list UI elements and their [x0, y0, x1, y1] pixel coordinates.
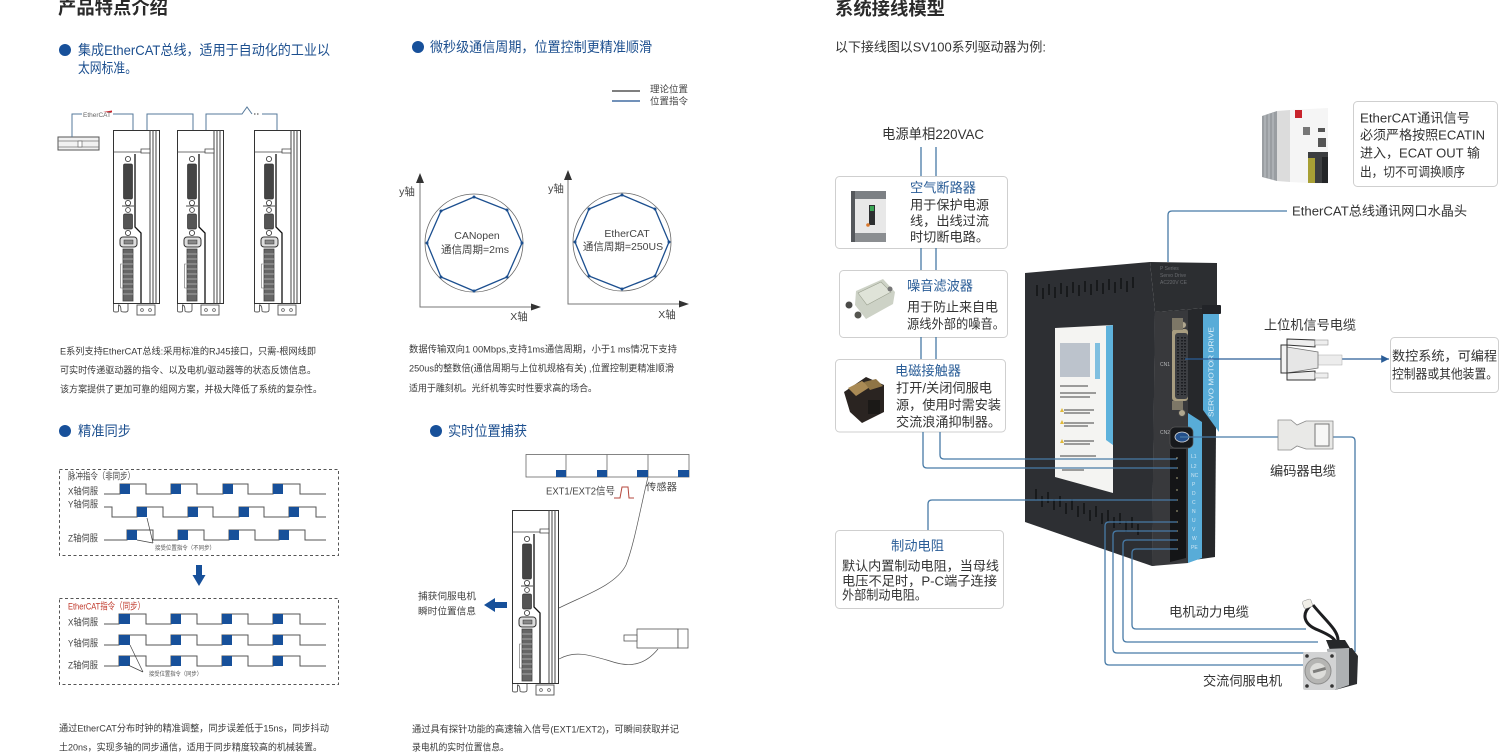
illustration: servo drive: P Series — [1160, 266, 1179, 272]
illustration: servo drive: CN2 — [1160, 430, 1170, 436]
text: wiring intro: 以下接线图以SV100系列驱动器为例: — [835, 38, 1046, 54]
chart: EtherCAT trajectory — [548, 170, 689, 321]
terminal labels: PE — [1191, 545, 1198, 551]
chart: EtherCAT command, synchronized: Z轴伺服 — [68, 660, 98, 672]
chart: pulse command, not synchronized: 脉冲指令（非同步） — [68, 470, 135, 482]
legend — [612, 84, 688, 108]
callout: EtherCAT signal note: 进入，ECAT OUT 输 — [1360, 146, 1480, 160]
heading: EtherCAT bus: 集成EtherCAT总线，适用于自动化的工业以 — [78, 42, 330, 58]
callout: CNC / PLC: 数控系统，可编程 — [1392, 348, 1497, 364]
icon: breaker — [851, 191, 886, 242]
wiring: motor power cable — [1105, 522, 1318, 665]
arrow: down — [192, 565, 206, 586]
illustration: servo drive: AC220V CE — [1160, 280, 1188, 286]
CN1 connector — [1172, 318, 1188, 416]
chart: EtherCAT command, synchronized: 接受位置指令（同步） — [149, 670, 202, 678]
CN2 connector — [1170, 427, 1193, 448]
text: communication cycle description — [409, 344, 677, 394]
text: communication cycle description: 数据传输双向1 00Mbps,支持1ms通信周期，小于1 ms情况下支持 — [409, 344, 677, 356]
text: capture description: 通过具有探针功能的高速输入信号(EXT1/EXT2)，可瞬间获取并记 — [412, 724, 679, 736]
wiring: controller signal cable — [1185, 358, 1389, 360]
diagram: position capture: EXT1/EXT2信号 — [546, 486, 615, 498]
text: communication cycle description: 适用于雕刻机。光纤机等实时性要求高的场合。 — [409, 382, 597, 394]
diagram: EtherCAT daisy chain of drives: EtherCAT — [83, 113, 111, 119]
terminal labels: NC — [1191, 473, 1199, 479]
chart: CANopen trajectory: CANopen — [454, 230, 500, 242]
text: capture description — [412, 724, 679, 753]
power terminal — [1170, 449, 1186, 562]
heading: EtherCAT bus — [59, 42, 330, 76]
diagram: position capture: 瞬时位置信息 — [418, 604, 476, 618]
heading: microsecond cycle: 微秒级通信周期，位置控制更精准顺滑 — [430, 39, 652, 55]
chart: EtherCAT trajectory: X轴 — [658, 308, 676, 321]
terminal labels: L1 — [1191, 454, 1197, 460]
panel: air circuit breaker: 线，出线过流 — [910, 214, 989, 228]
terminal labels: D — [1192, 491, 1196, 497]
chart: pulse command, not synchronized: 接受位置指令（不同步） — [155, 544, 215, 552]
text: EtherCAT bus description — [60, 346, 322, 396]
chart: EtherCAT command, synchronized: Y轴伺服 — [68, 638, 98, 650]
wiring: power lines to terminals — [921, 147, 1177, 530]
chart: EtherCAT trajectory: EtherCAT — [604, 228, 650, 240]
panel: magnetic contactor: 交流浪涌抑制器。 — [896, 414, 1001, 430]
panel: air circuit breaker: 时切断电路。 — [910, 230, 989, 244]
illustration: servo drive: CN1 — [1160, 362, 1170, 368]
icon: signal cable connector — [1281, 339, 1342, 380]
illustration: servo drive — [1025, 262, 1221, 566]
panel: braking resistor: 外部制动电阻。 — [842, 588, 927, 602]
illustration: servo drive: Servo Drive — [1160, 273, 1186, 279]
terminal labels: P — [1192, 482, 1196, 488]
text: sync description — [59, 722, 329, 753]
panel: noise filter — [840, 270, 1008, 338]
label: host signal cable: 上位机信号电缆 — [1264, 318, 1356, 332]
diagram: position capture: 捕获伺服电机 — [418, 590, 476, 602]
callout: EtherCAT signal note: EtherCAT通讯信号 — [1360, 110, 1470, 126]
heading: position capture: 实时位置捕获 — [448, 423, 527, 439]
icon: filter — [846, 279, 895, 319]
label: AC servo motor: 交流伺服电机 — [1203, 672, 1282, 688]
wiring: encoder cable — [1180, 437, 1355, 652]
callout: CNC / PLC — [1390, 338, 1498, 392]
panel: air circuit breaker: 空气断路器 — [910, 180, 977, 196]
diagram: position capture: 传感器 — [646, 480, 677, 494]
chart: CANopen trajectory: X轴 — [510, 310, 528, 323]
legend: 位置指令 — [650, 96, 688, 108]
label: EtherCAT connector: EtherCAT总线通讯网口水晶头 — [1292, 204, 1467, 218]
legend: 理论位置 — [650, 84, 688, 96]
terminal labels: W — [1192, 536, 1197, 542]
text: communication cycle description: 250us的整数倍(通信周期与上位机规格有关) ,位置控制更精准顺滑 — [409, 362, 674, 374]
chart: pulse command, not synchronized — [60, 470, 338, 556]
text: EtherCAT bus description: 可实时传递驱动器的指令、以及电机/驱动器等的状态反馈信息。 — [60, 364, 316, 376]
heading: precise sync: 精准同步 — [78, 423, 131, 439]
callout: EtherCAT signal note: 出，切不可调换顺序 — [1360, 164, 1465, 180]
label: encoder cable: 编码器电缆 — [1270, 464, 1336, 478]
panel: braking resistor: 默认内置制动电阻，当母线 — [842, 558, 999, 574]
illustration: AC servo motor — [1302, 599, 1358, 690]
diagram: EtherCAT daisy chain of drives — [58, 107, 300, 315]
chart: pulse command, not synchronized: Z轴伺服 — [68, 532, 98, 544]
terminal labels: N — [1192, 509, 1196, 515]
panel: noise filter: 噪音滤波器 — [907, 278, 974, 294]
terminal labels: V — [1192, 527, 1196, 533]
panel: braking resistor: 制动电阻 — [891, 538, 944, 554]
terminal labels: L2 — [1191, 464, 1197, 470]
diagram: position capture — [418, 454, 689, 695]
chart: CANopen trajectory — [399, 173, 541, 323]
panel: air circuit breaker: 用于保护电源 — [910, 198, 989, 212]
callout: EtherCAT signal note — [1354, 102, 1498, 186]
panel: noise filter: 源线外部的噪音。 — [907, 316, 1005, 332]
icon: contactor — [844, 377, 884, 423]
label: motor power cable: 电机动力电缆 — [1169, 604, 1249, 620]
chart: CANopen trajectory: 通信周期=2ms — [441, 244, 509, 256]
chart: pulse command, not synchronized: X轴伺服 — [68, 486, 98, 498]
callout: EtherCAT signal note: 必须严格按照ECATIN — [1360, 128, 1485, 142]
blue strips — [1203, 314, 1219, 432]
label: power supply: 电源单相220VAC — [882, 126, 984, 142]
chart: EtherCAT trajectory: y轴 — [548, 182, 564, 195]
panel: magnetic contactor — [836, 360, 1006, 432]
terminal labels: C — [1192, 500, 1196, 506]
panel: air circuit breaker — [836, 176, 1008, 248]
label sticker — [1055, 325, 1113, 493]
panel: braking resistor — [836, 530, 1004, 608]
chart: pulse command, not synchronized: Y轴伺服 — [68, 498, 98, 510]
terminal labels: U — [1192, 518, 1196, 524]
panel: magnetic contactor: 电磁接触器 — [895, 362, 962, 378]
chart: EtherCAT command, synchronized — [60, 598, 338, 684]
chart: EtherCAT command, synchronized: X轴伺服 — [68, 616, 98, 628]
panel: magnetic contactor: 打开/关闭伺服电 — [896, 380, 992, 396]
vents — [1036, 277, 1138, 535]
panel: noise filter: 用于防止来自电 — [907, 300, 998, 314]
wiring: EtherCAT line — [1168, 211, 1287, 262]
panel: braking resistor: 电压不足时，P-C端子连接 — [842, 572, 997, 588]
illustration: controller module — [1262, 108, 1328, 184]
icon: encoder connector — [1278, 420, 1333, 450]
chart: EtherCAT command, synchronized: EtherCAT指令（同步） — [68, 600, 145, 612]
terminal labels — [1191, 454, 1199, 551]
text: sync description: 通过EtherCAT分布时钟的精准调整，同步误差低于15ns，同步抖动 — [59, 722, 329, 734]
panel: magnetic contactor: 源，使用时需安装 — [896, 396, 1001, 412]
chart: EtherCAT trajectory: 通信周期=250US — [583, 241, 663, 253]
illustration: servo drive: SERVO MOTOR DRIVE — [1206, 327, 1216, 417]
heading: EtherCAT bus: 太网标准。 — [78, 60, 137, 76]
chart: CANopen trajectory: y轴 — [399, 185, 415, 198]
text: EtherCAT bus description: 该方案提供了更加可靠的组网方案，并极大降低了系统的复杂性。 — [60, 384, 322, 396]
text: EtherCAT bus description: E系列支持EtherCAT总线:采用标准的RJ45接口，只需-根网线即 — [60, 346, 316, 358]
